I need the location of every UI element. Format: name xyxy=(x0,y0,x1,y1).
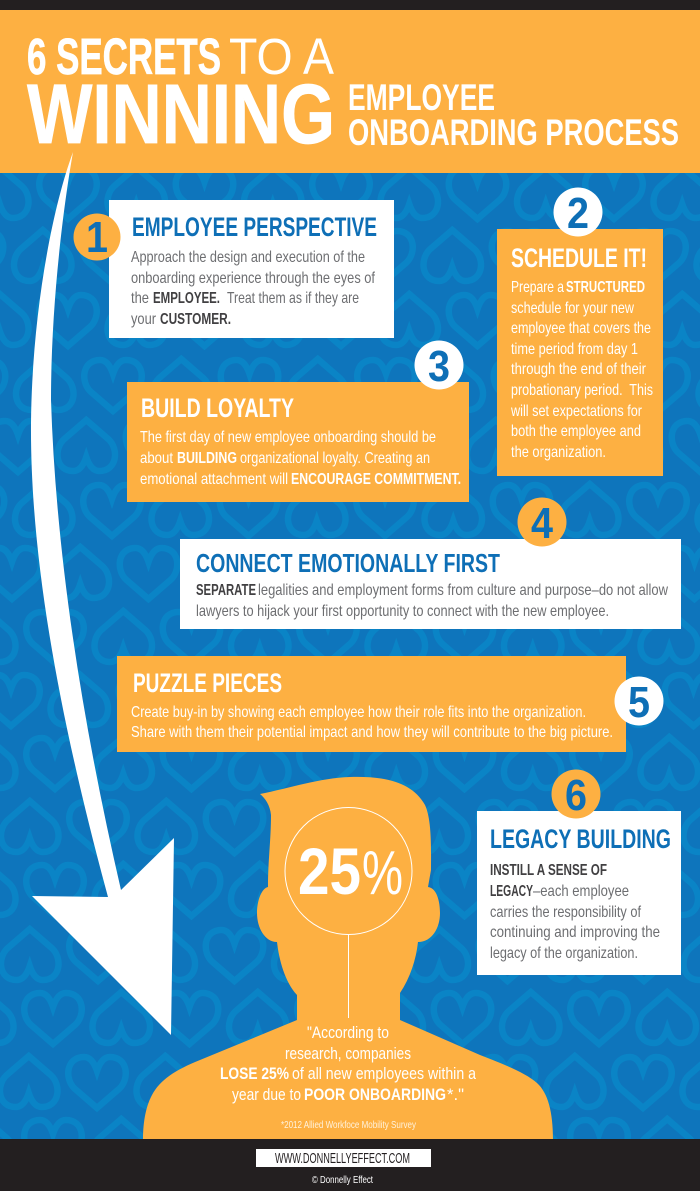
text block: CUSTOMER. xyxy=(160,311,231,328)
number 3: 3 xyxy=(428,342,450,391)
panel: connect emotionally first xyxy=(180,498,681,629)
number 6: 6 xyxy=(565,771,587,820)
text block: continuing and improving the xyxy=(490,924,660,941)
text block: employee that covers the xyxy=(511,320,651,337)
title: WINNING xyxy=(27,67,335,161)
25% statistic xyxy=(298,834,403,908)
text block: Prepare a xyxy=(511,279,564,296)
number 1: 1 xyxy=(86,213,108,262)
number 3 xyxy=(414,340,464,391)
text block: time period from day 1 xyxy=(511,341,638,358)
text block: Treat them as if they are xyxy=(227,290,359,307)
title: EMPLOYEE xyxy=(348,77,495,118)
text block xyxy=(131,704,613,741)
quote: research, companies xyxy=(285,1044,411,1063)
text block: emotional attachment will xyxy=(140,471,288,488)
text block: your xyxy=(131,311,157,328)
website box: WWW.DONNELLYEFFECT.COM xyxy=(275,1150,410,1167)
text block: BUILDING xyxy=(177,450,237,467)
text block: probationary period. This xyxy=(511,382,653,399)
text block: lawyers to hijack your first opportunity to connect with the new employee. xyxy=(196,603,609,620)
heading: SCHEDULE IT! xyxy=(511,243,647,273)
number 4 xyxy=(518,498,566,548)
text block: LEGACY xyxy=(490,883,533,900)
text block: –each employee xyxy=(533,883,629,900)
panel: puzzle pieces xyxy=(117,656,626,752)
25% statistic: % xyxy=(362,839,403,908)
footer xyxy=(0,1139,700,1191)
text block: will set expectations for xyxy=(510,403,643,420)
text block: legacy of the organization. xyxy=(490,945,638,962)
text block xyxy=(140,429,461,488)
arrow xyxy=(31,152,174,1035)
top black bar xyxy=(0,0,700,10)
text block xyxy=(131,249,375,328)
25% statistic: 25 xyxy=(298,834,361,908)
number 2: 2 xyxy=(567,189,589,238)
number 5: 5 xyxy=(628,678,650,727)
heading: BUILD LOYALTY xyxy=(141,393,294,423)
source note: *2012 Allied Workfoce Mobility Survey xyxy=(281,1119,417,1131)
text block: The first day of new employee onboarding should be xyxy=(140,429,436,446)
text block: INSTILL A SENSE OF xyxy=(490,862,607,879)
text block: the organization. xyxy=(511,444,606,461)
text block: SEPARATE xyxy=(196,582,256,599)
text block xyxy=(510,279,653,461)
quote: LOSE 25% xyxy=(220,1064,289,1083)
text block: carries the responsibility of xyxy=(490,904,641,921)
header band xyxy=(0,10,700,173)
quote: POOR ONBOARDING xyxy=(304,1085,446,1104)
text block xyxy=(196,582,668,620)
text block: schedule for your new xyxy=(511,300,634,317)
text block: onboarding experience through the eyes of xyxy=(131,270,375,287)
title: 6 SECRETS xyxy=(27,28,221,85)
quote: of all new employees within a xyxy=(292,1064,476,1083)
number 2 xyxy=(554,188,602,238)
text block: ENCOURAGE COMMITMENT. xyxy=(291,471,461,488)
panel: employee perspective xyxy=(109,200,394,338)
text block: Create buy-in by showing each employee how their role fits into the organization. xyxy=(131,704,586,721)
text block: about xyxy=(140,450,173,467)
number 1 xyxy=(74,213,120,262)
text block: Approach the design and execution of the xyxy=(131,249,365,266)
text block: both the employee and xyxy=(511,423,641,440)
text block: the xyxy=(131,290,149,307)
quote: *." xyxy=(447,1085,464,1104)
person silhouette with statistic xyxy=(143,777,553,1140)
text block: through the end of their xyxy=(511,361,647,378)
quote: "According to xyxy=(307,1023,389,1042)
circle and connector line xyxy=(285,808,412,934)
number 6 xyxy=(552,770,600,820)
quote xyxy=(220,1023,476,1104)
text block xyxy=(490,862,660,962)
heading: EMPLOYEE PERSPECTIVE xyxy=(132,212,377,242)
copyright: © Donnelly Effect xyxy=(312,1174,373,1186)
number 4: 4 xyxy=(531,499,553,548)
silhouette xyxy=(143,777,553,1140)
quote: year due to xyxy=(232,1085,301,1104)
text block: EMPLOYEE. xyxy=(153,290,220,307)
title xyxy=(27,28,679,161)
website box xyxy=(256,1149,431,1167)
heading: CONNECT EMOTIONALLY FIRST xyxy=(196,548,500,578)
panel: build loyalty xyxy=(127,382,469,502)
text block: organizational loyalty. Creating an xyxy=(240,450,430,467)
text block: STRUCTURED xyxy=(566,279,645,296)
title: TO A xyxy=(229,28,334,85)
panel: schedule it xyxy=(497,229,663,476)
number 5 xyxy=(614,676,664,727)
panel: legacy building xyxy=(477,770,681,975)
heading: PUZZLE PIECES xyxy=(133,668,282,698)
